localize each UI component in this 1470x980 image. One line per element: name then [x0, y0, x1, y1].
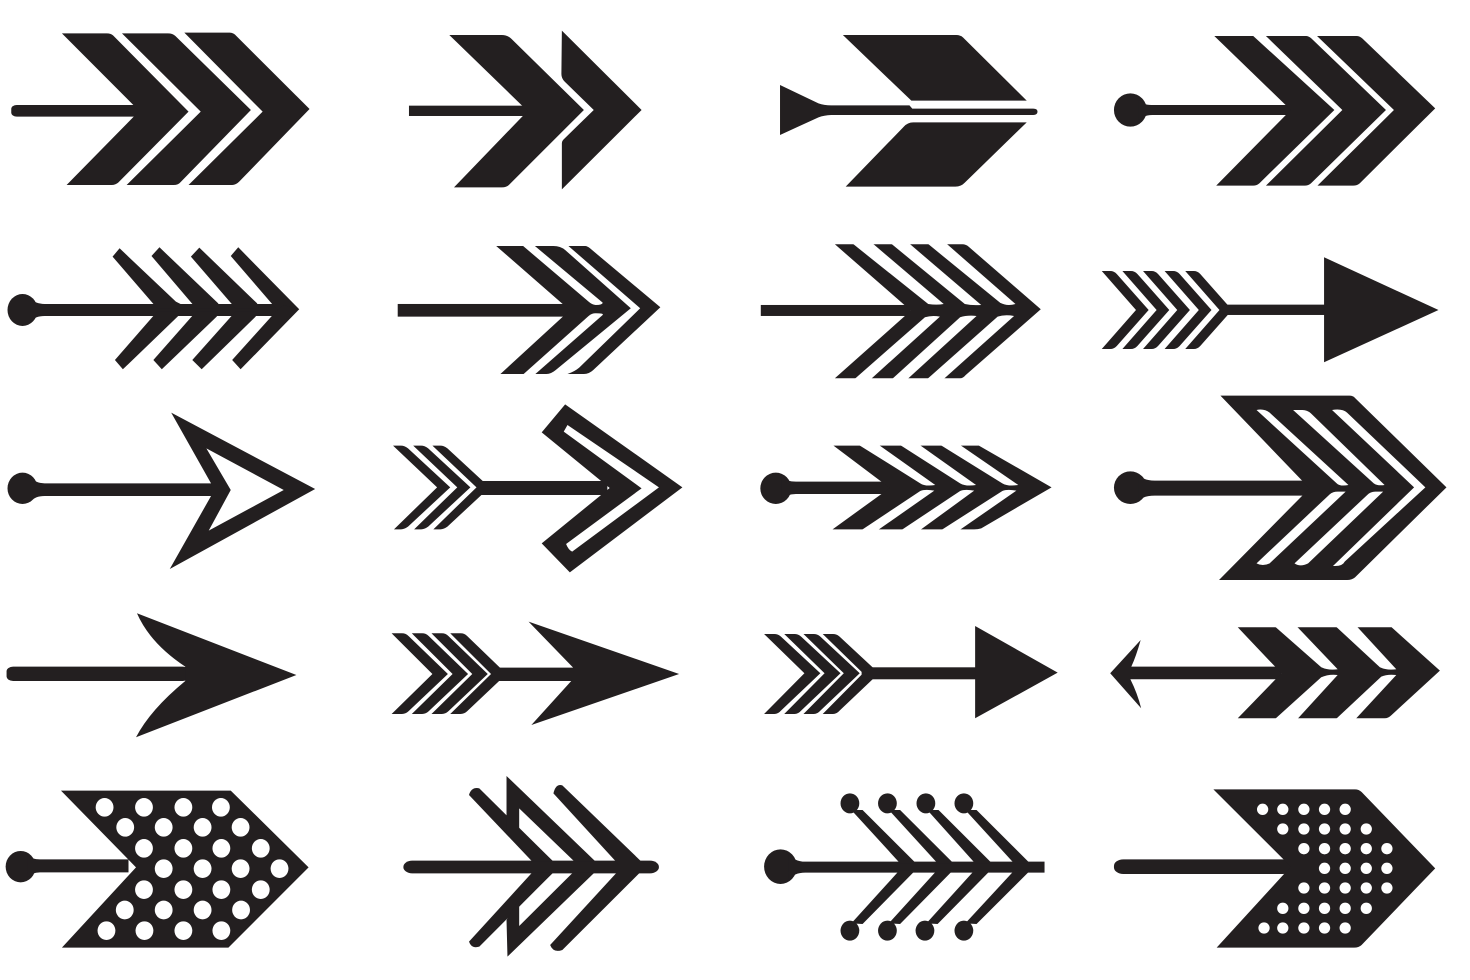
arrow: fletched tail with hollow chevron head: [393, 404, 682, 572]
arrow: split feather with flared tail: [780, 35, 1038, 187]
arrow: fletched tail with large triangle head: [764, 626, 1058, 718]
arrow: line barbs with zigzag: [403, 776, 659, 957]
arrow: triple chevron, round tail: [1114, 36, 1435, 186]
arrow: circuit barbs with dots: [764, 793, 1045, 941]
arrow: dotted chevron, round tail: [6, 791, 309, 948]
arrow: four barbs, round tail: [8, 247, 299, 369]
arrow: double chevron with cut head: [409, 31, 642, 189]
arrow: triple chevron, plain tail: [11, 33, 310, 185]
arrow: four-band slim chevron, plain tail: [761, 243, 1041, 379]
arrow: slim triple chevron, plain tail: [398, 245, 660, 375]
arrow: outlined head, round tail: [8, 413, 315, 569]
arrow: fletched tail with barbed head: [392, 622, 679, 725]
arrow: striped barbs, round tail: [760, 444, 1052, 531]
arrow: solid barbed head, plain tail: [7, 613, 296, 737]
arrow: large slotted chevron, round tail: [1114, 396, 1446, 580]
arrow: dotted chevron, plain tail: [1114, 789, 1435, 948]
arrow: double-ended with chevron bands: [1110, 626, 1440, 720]
arrow: fletched tail with triangle head: [1102, 257, 1438, 362]
